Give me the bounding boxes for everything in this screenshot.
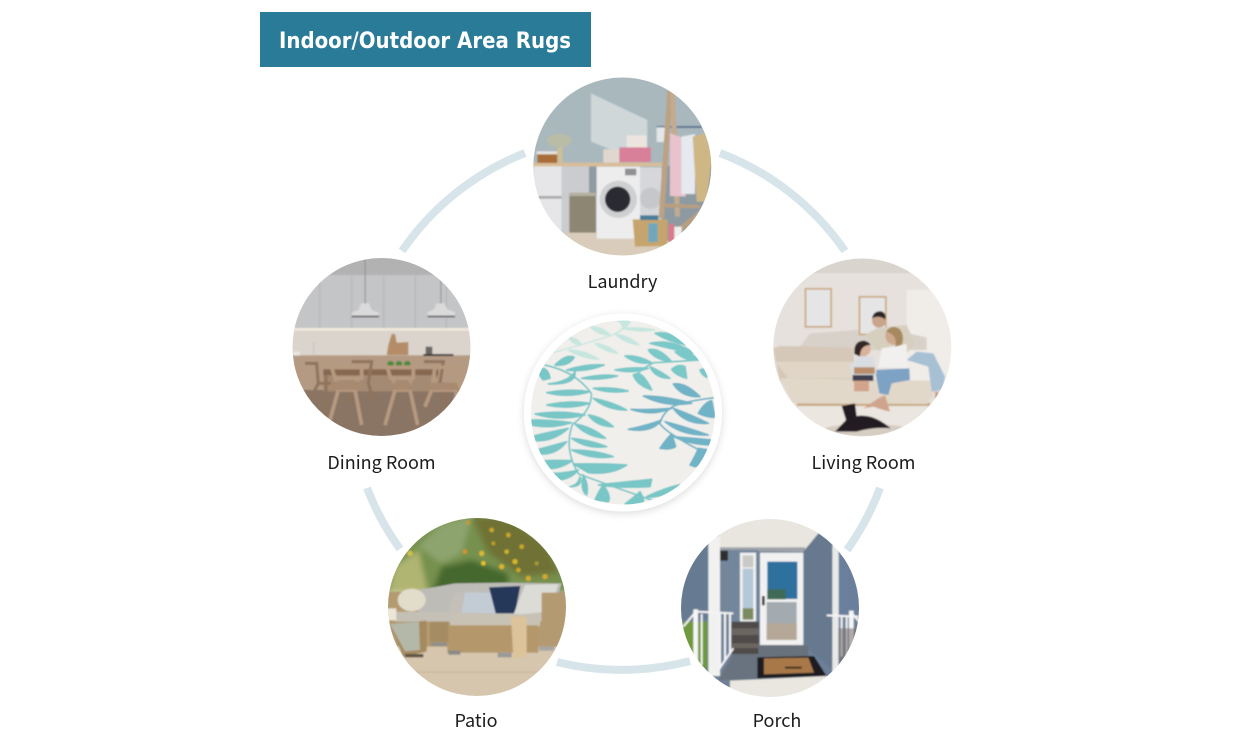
label: porch: Porch	[753, 707, 801, 733]
rug: left teal sprig	[531, 356, 680, 505]
title banner	[260, 12, 591, 67]
photo: porch	[681, 519, 859, 697]
rug: lower right sprig	[628, 384, 715, 467]
photo: dining room	[292, 258, 470, 436]
label: laundry: Laundry	[588, 268, 658, 294]
photo: laundry room	[533, 78, 712, 256]
rug: upper right sprig	[615, 333, 708, 390]
label: patio: Patio	[454, 707, 498, 733]
label: dining room: Dining Room	[327, 449, 436, 475]
rug: pale sprig	[553, 319, 655, 359]
photo: patio	[388, 518, 566, 696]
photo: living room	[773, 258, 952, 436]
connecting ring arcs	[367, 153, 880, 670]
center rug swatch	[515, 310, 730, 515]
label: living room: Living Room	[812, 449, 915, 475]
title text: Indoor/Outdoor Area Rugs	[279, 29, 571, 54]
